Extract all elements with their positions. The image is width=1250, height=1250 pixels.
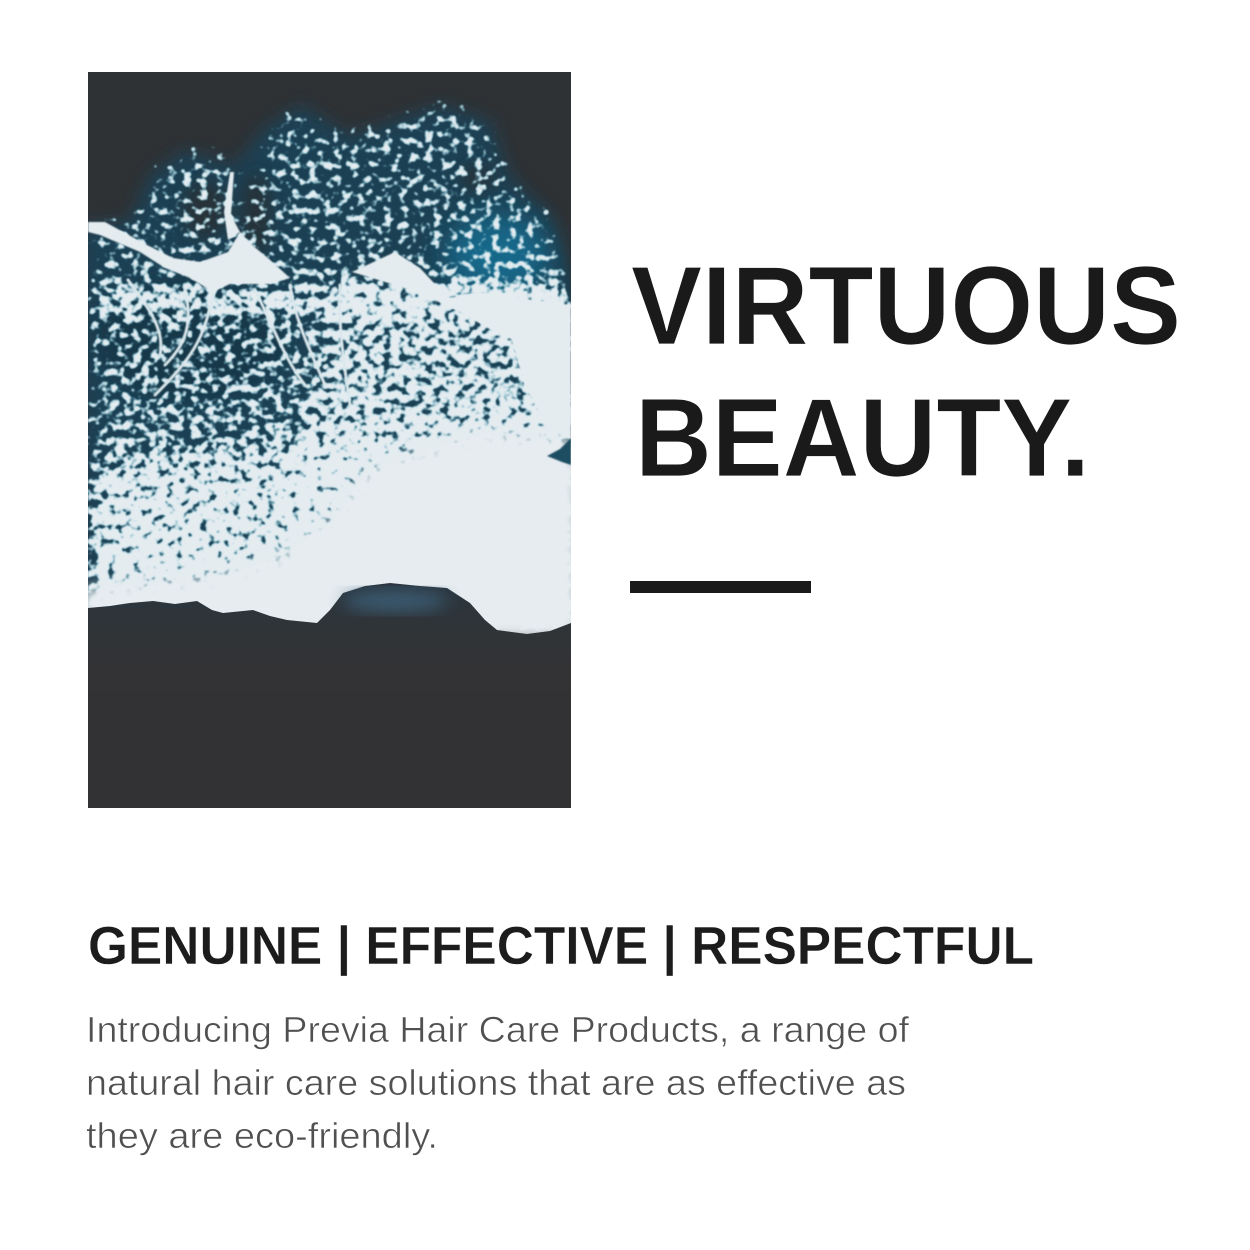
darker sand bottom [88,690,571,808]
dark teal pool below crest [101,288,278,395]
black sand foreground [88,583,571,651]
subheading: values: GENUINE | EFFECTIVE | RESPECTFUL [88,916,1034,977]
title line 2: BEAUTY. [635,376,1090,500]
dark sand base [88,72,571,634]
accent bar under title [630,581,811,593]
foam ridge on the right [352,252,571,350]
photo: aerial ocean waves on black sand [80,72,580,808]
white foam texture [85,90,575,630]
title line 1: VIRTUOUS [631,244,1181,368]
body line 1: Introducing Previa Hair Care Products, a range of [86,1009,910,1050]
wave crest [88,222,290,292]
bright teal water patch [445,215,549,295]
body line 2: natural hair care solutions that are as effective as [86,1062,906,1103]
body line 3: they are eco-friendly. [86,1115,438,1156]
dark pockets in top foam [183,166,494,257]
teal foam texture [85,90,575,630]
foam veins [128,280,350,405]
right column of foam [510,325,571,440]
dark blue notch at right edge [547,438,571,465]
dark teal water body [80,105,580,620]
crest vein up to the left cluster [224,172,240,240]
title: VIRTUOUS BEAUTY. [631,244,1181,500]
solid foam masses [88,172,571,440]
body text [86,1009,910,1156]
blue tint beneath shoreline arch [343,590,447,612]
soft foam body above the shore [80,430,580,640]
